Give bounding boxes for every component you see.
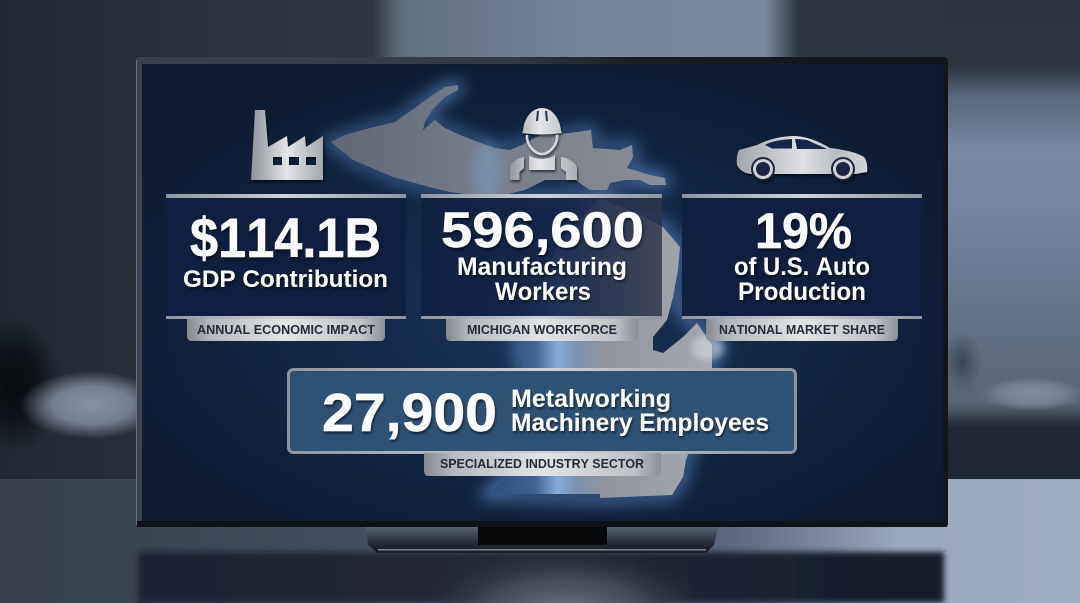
value and label: $114.1B [190, 206, 381, 269]
upper peninsula [331, 85, 666, 196]
panel: auto production [682, 194, 922, 341]
caption text: SPECIALIZED INDUSTRY SECTOR [440, 456, 645, 471]
white glow near thumb [692, 336, 724, 360]
bottom rule [682, 316, 922, 319]
value and label: Manufacturing [457, 253, 627, 281]
value and label [734, 203, 870, 306]
icon: worker with hard hat [510, 108, 577, 180]
bottom rule [166, 316, 406, 319]
caption text: NATIONAL MARKET SHARE [719, 322, 885, 337]
panel: manufacturing workers [421, 194, 662, 341]
panel: metalworking machinery employees [288, 370, 796, 476]
value and label: Machinery Employees [511, 409, 769, 437]
value and label: 19% [755, 203, 852, 259]
caption tag [706, 319, 898, 341]
caption text: MICHIGAN WORKFORCE [467, 322, 617, 337]
Michigan map [331, 85, 724, 498]
top rule [166, 194, 406, 198]
top rule [421, 194, 662, 198]
TV screen [142, 64, 943, 521]
value and label: Metalworking [511, 385, 671, 413]
value and label [183, 206, 388, 293]
TV reflection on table [138, 552, 944, 603]
icon: car [737, 136, 867, 181]
caption tag [424, 453, 661, 476]
value and label [441, 202, 644, 306]
caption tag [446, 319, 638, 341]
icon: factory [251, 110, 323, 180]
panel: GDP contribution [166, 194, 406, 341]
table surface [0, 479, 1080, 603]
TV bezel [136, 57, 948, 527]
TV stand [366, 526, 718, 553]
value and label: GDP Contribution [183, 266, 388, 293]
value and label: 27,900 [322, 383, 497, 443]
caption tag [187, 319, 385, 341]
blue glow on upper peninsula [473, 142, 501, 202]
value and label [322, 383, 769, 443]
lower peninsula [488, 198, 712, 498]
value and label: of U.S. Auto [734, 253, 870, 281]
caption text: ANNUAL ECONOMIC IMPACT [197, 322, 375, 337]
value and label: Workers [495, 278, 591, 306]
value and label: Production [738, 278, 866, 306]
bottom rule [421, 316, 662, 319]
top rule [682, 194, 922, 198]
value and label: 596,600 [441, 202, 644, 258]
